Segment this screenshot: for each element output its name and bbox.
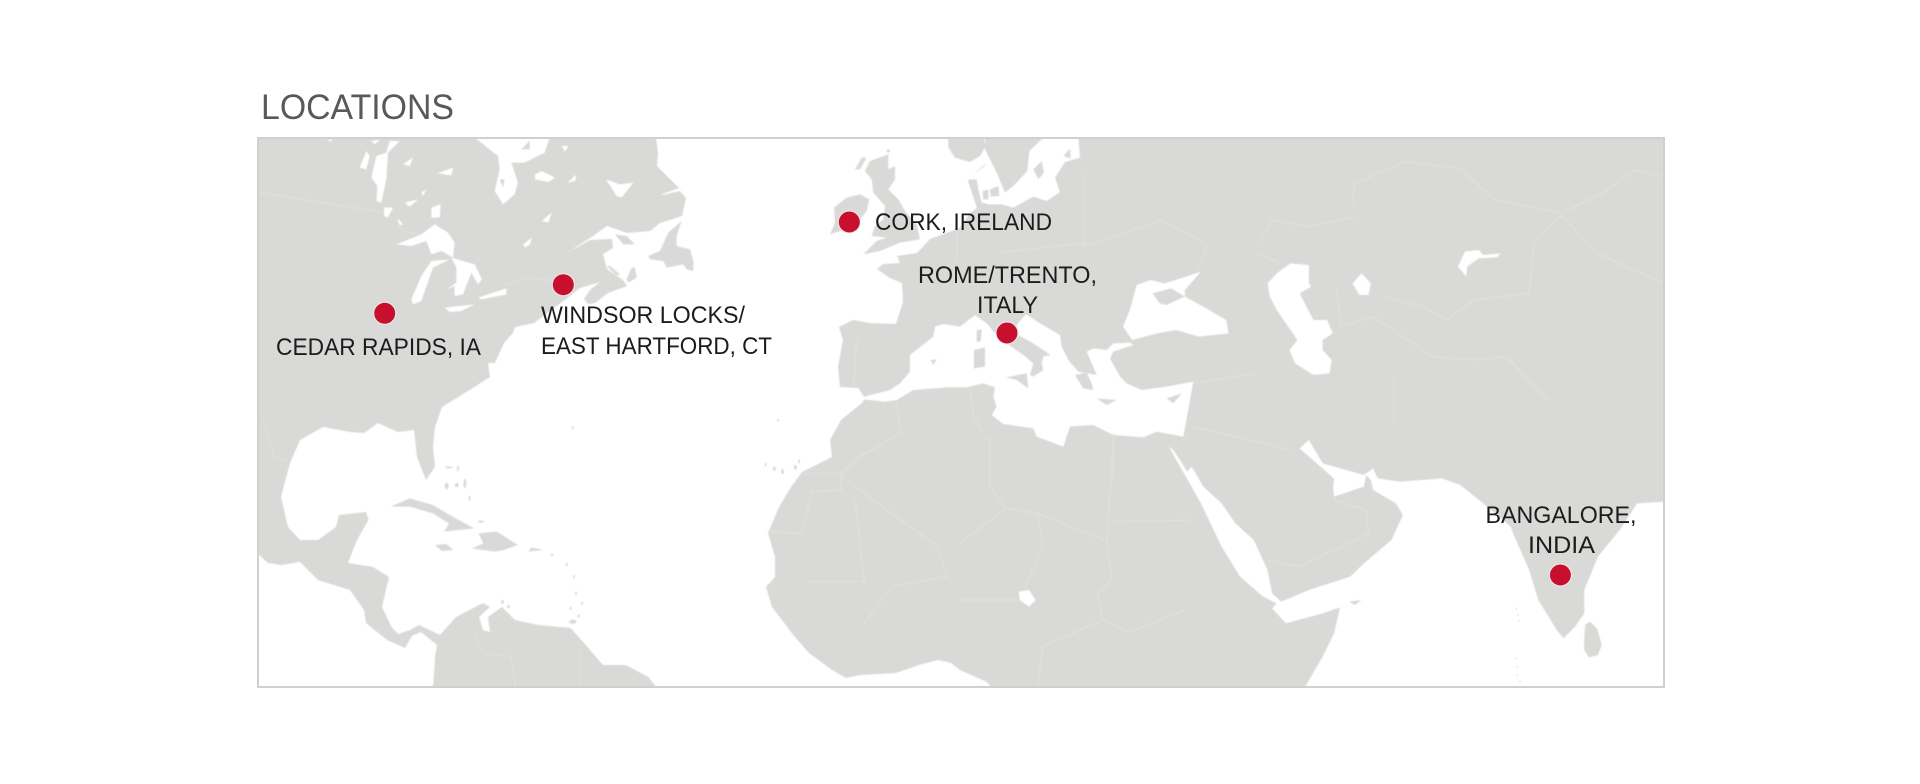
british isles [830,138,1071,254]
marker: Windsor Locks / East Hartford [541,274,772,360]
marker: Cork: CORK, IRELAND [875,209,1052,236]
marker: Cedar Rapids [276,302,481,361]
atlantic ocean, gulf and caribbean [281,137,992,688]
caribbean and atlantic islands [391,419,800,624]
black sea and central asian lakes [1123,250,1501,375]
marker: Rome / Trento [918,262,1097,344]
country borders [260,162,1662,687]
canadian maritime islands [523,146,693,283]
great lakes and canadian lakes [328,138,550,312]
marker: Cedar Rapids: CEDAR RAPIDS, IA [276,334,481,361]
baltic sea [967,138,1080,208]
map landmass and seas [257,137,1665,688]
pacific ocean [257,553,437,688]
marker: Bangalore: BANGALORE, [1486,502,1636,529]
marker: Rome / Trento: ROME/TRENTO, [918,262,1097,289]
marker: Bangalore [1486,502,1636,586]
scandinavia [948,138,986,162]
marker: Rome / Trento: ITALY [977,292,1038,319]
marker: Windsor Locks / East Hartford: WINDSOR LOCKS/ [541,302,745,329]
mediterranean islands [931,313,1182,405]
marker: Windsor Locks / East Hartford: EAST HARTFORD, CT [541,333,772,360]
title: LOCATIONS [261,88,454,127]
indian ocean, red sea and persian gulf [1019,440,1665,688]
mediterranean sea [862,313,1193,447]
marker: Bangalore: INDIA [1528,532,1595,559]
panel: world map [257,137,1665,688]
